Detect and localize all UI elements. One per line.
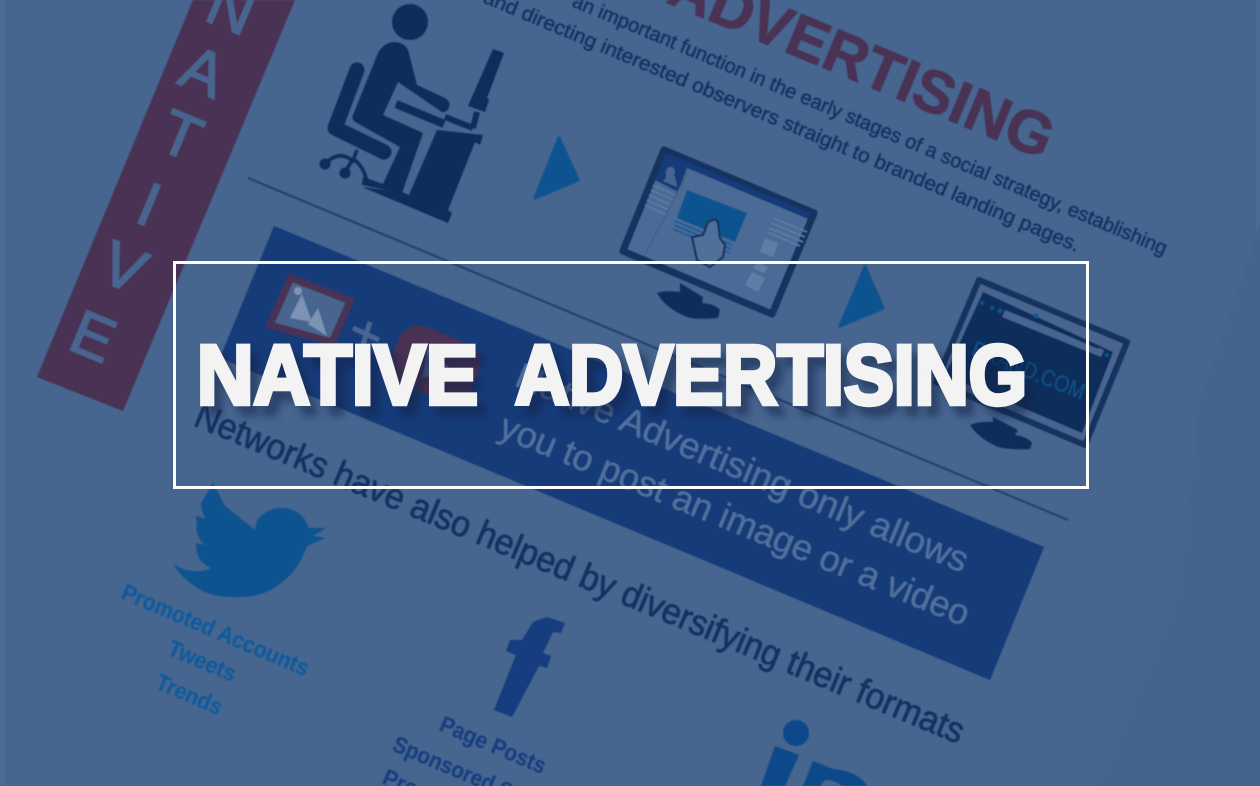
vertical NATIVE banner: E <box>61 297 125 377</box>
twitter formats: Promoted Accounts <box>118 579 313 681</box>
vertical NATIVE banner: V <box>92 228 157 308</box>
twitter formats: Trends <box>152 669 227 720</box>
vertical NATIVE banner: T <box>150 97 212 175</box>
callout text: Native Advertising only allows <box>510 355 975 580</box>
facebook formats: Page Posts <box>436 711 550 779</box>
plus sign <box>353 322 379 348</box>
icon: monitor with social feed <box>623 150 814 319</box>
vertical NATIVE banner <box>37 0 295 411</box>
arrow 2 <box>840 267 883 326</box>
blue callout banner <box>220 226 1044 680</box>
vertical NATIVE banner: I <box>128 170 170 240</box>
icon: person at desk <box>320 4 504 223</box>
icon: video play button <box>392 325 480 396</box>
icon: image <box>270 278 350 342</box>
vertical NATIVE banner: A <box>171 32 236 112</box>
callout text: you to post an image or a video <box>494 405 976 634</box>
subheading: networks: Networks have also helped by diversifying their formats <box>189 395 971 751</box>
twitter formats <box>121 584 308 714</box>
title frame <box>173 261 1089 489</box>
facebook formats <box>382 716 545 786</box>
title: ADVERTISING <box>515 328 1027 422</box>
divider line <box>248 178 1068 520</box>
arrow 1 <box>535 138 578 198</box>
title: NATIVE <box>197 328 478 422</box>
icon: linkedin <box>761 720 867 786</box>
icon: twitter bird <box>173 483 326 597</box>
twitter formats: Tweets <box>164 635 240 687</box>
icon: facebook f <box>494 617 565 717</box>
icon: monitor with BRAND.COM page: BRAND.COM <box>968 336 1089 405</box>
icon: monitor with BRAND.COM page <box>936 280 1127 449</box>
